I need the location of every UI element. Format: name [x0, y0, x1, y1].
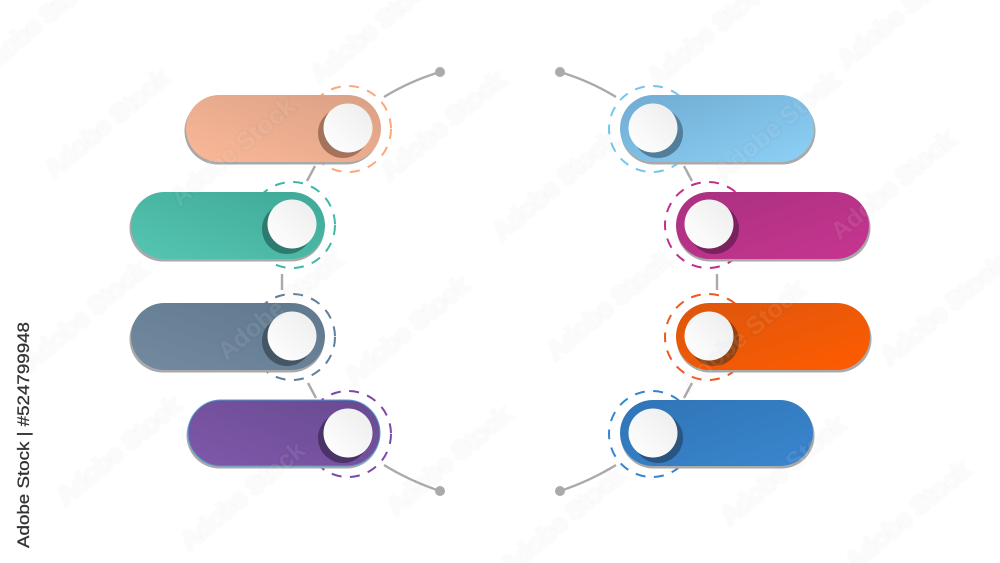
connector: top left curve — [384, 67, 445, 97]
watermark pattern: Adobe Stock — [17, 256, 152, 376]
toggle: purple — [186, 391, 391, 477]
watermark pattern: Adobe Stock — [541, 246, 676, 366]
toggle: peach — [184, 86, 391, 172]
connector: bottom left curve — [384, 465, 445, 496]
watermark pattern: Adobe Stock — [375, 66, 510, 186]
watermark pattern: Adobe Stock — [825, 126, 960, 246]
watermark pattern: Adobe Stock — [715, 411, 850, 531]
watermark pattern: Adobe Stock — [339, 271, 474, 391]
connector: bottom right curve — [555, 465, 616, 496]
watermark pattern: Adobe Stock — [175, 436, 310, 556]
watermark pattern: Adobe Stock — [709, 66, 844, 186]
watermark pattern: Adobe Stock — [381, 401, 516, 521]
watermark pattern: Adobe Stock — [675, 276, 810, 396]
toggle: slate — [130, 294, 335, 380]
watermark pattern: Adobe Stock — [212, 246, 347, 366]
watermark pattern: Adobe Stock — [165, 92, 300, 212]
toggle: orange — [665, 294, 872, 380]
connector: top right curve — [555, 67, 616, 97]
connector: right short links — [684, 166, 717, 398]
side stock credit: Adobe Stock | #524799948 — [14, 322, 33, 548]
connector: left short links — [282, 166, 316, 398]
watermark pattern: Adobe Stock — [51, 391, 186, 511]
watermark pattern: Adobe Stock — [487, 126, 622, 246]
toggle: teal — [130, 182, 335, 268]
watermark pattern: Adobe Stock — [39, 64, 174, 184]
toggle: blue — [609, 391, 814, 477]
toggle: light blue — [609, 86, 816, 172]
toggle: magenta — [665, 182, 870, 268]
